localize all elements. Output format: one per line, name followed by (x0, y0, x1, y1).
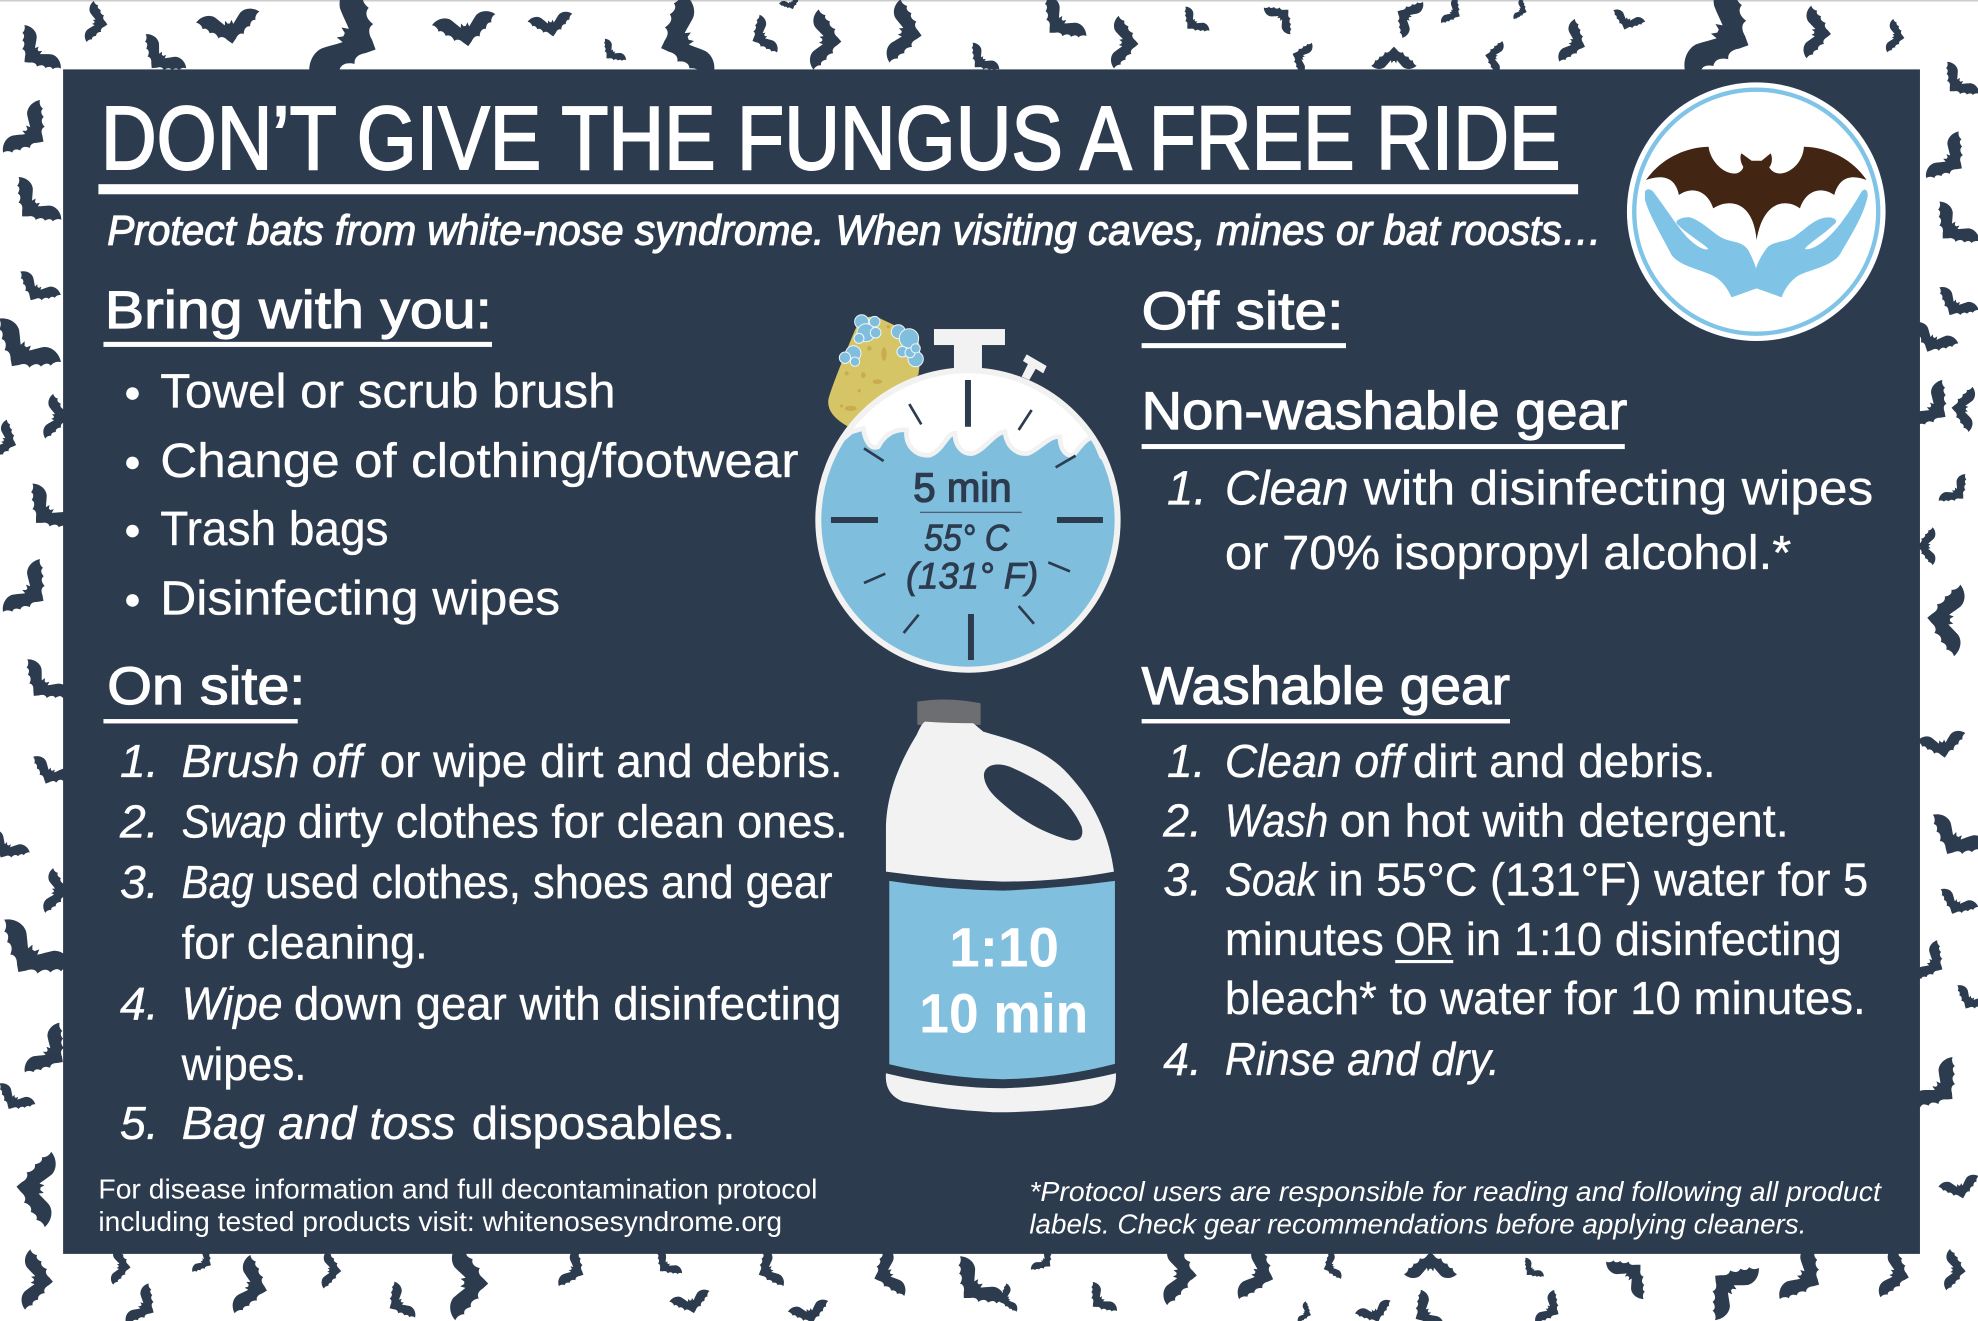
washable gear steps: 4. (1163, 1033, 1202, 1085)
non-washable steps: or 70% isopropyl alcohol.* (1225, 527, 1791, 580)
on site numbered steps: wipes. (181, 1038, 307, 1090)
washable gear steps (1162, 735, 1868, 1085)
icon: sponge with soap bubbles (828, 315, 923, 427)
title: DON’T GIVE THE FUNGUS A FREE RIDE (101, 88, 1560, 188)
on site numbered steps: for cleaning. (182, 917, 428, 969)
on site numbered steps: 1. (120, 735, 159, 787)
icon: stopwatch, 5 min at 55 C (810, 329, 1127, 670)
heading: off site: Off site: (1142, 282, 1343, 341)
on site numbered steps: Brush off (182, 735, 366, 787)
bring with you bullet list (126, 365, 799, 625)
heading: washable gear: Washable gear (1142, 657, 1510, 716)
heading: non-washable gear: Non-washable gear (1142, 382, 1627, 441)
on site numbered steps: 5. (120, 1097, 159, 1149)
icon: bleach bottle, 1:10 for 10 min: 1:10 (949, 916, 1059, 979)
on site numbered steps: used clothes, shoes and gear (265, 856, 833, 908)
washable gear steps: OR (1395, 913, 1453, 965)
footnote: product labels: labels. Check gear recommendations before applying cleaners. (1029, 1209, 1806, 1240)
icon: stopwatch, 5 min at 55 C: 5 min (913, 465, 1012, 511)
on site numbered steps: 3. (120, 856, 159, 908)
washable gear steps: in 1:10 disinfecting (1466, 913, 1842, 965)
washable gear steps: Soak (1225, 854, 1319, 906)
on site numbered steps: dirty clothes for clean ones. (298, 796, 848, 848)
non-washable steps (1167, 463, 1873, 580)
bring with you bullet list: Change of clothing/footwear (160, 435, 799, 488)
footnote: product labels: *Protocol users are responsible for reading and following all product (1029, 1176, 1882, 1207)
on site numbered steps: down gear with disinfecting (294, 977, 841, 1029)
washable gear steps: 3. (1163, 854, 1202, 906)
washable gear steps: minutes (1225, 913, 1384, 965)
washable gear steps: 1. (1167, 735, 1206, 787)
on site numbered steps (119, 735, 848, 1149)
washable gear steps: dirt and debris. (1413, 735, 1716, 787)
subtitle: Protect bats from white-nose syndrome. When visiting caves, mines or bat roosts… (107, 207, 1602, 254)
icon: bleach bottle, 1:10 for 10 min: 10 min (919, 982, 1088, 1045)
washable gear steps: Clean off (1225, 735, 1408, 787)
bring with you bullet list: Towel or scrub brush (160, 365, 616, 418)
heading: on site: On site: (107, 657, 305, 716)
icon: bleach bottle, 1:10 for 10 min (886, 699, 1116, 1112)
washable gear steps: bleach* to water for 10 minutes. (1225, 972, 1866, 1024)
icon: stopwatch, 5 min at 55 C: (131° F) (906, 554, 1038, 596)
washable gear steps: on hot with detergent. (1340, 794, 1789, 846)
on site numbered steps: or wipe dirt and debris. (380, 735, 843, 787)
washable gear steps: Wash (1225, 794, 1328, 846)
bring with you bullet list: Trash bags (160, 503, 389, 556)
on site numbered steps: 4. (120, 977, 159, 1029)
on site numbered steps: Wipe (182, 977, 283, 1029)
heading: bring with you: Bring with you: (105, 281, 492, 340)
washable gear steps: Rinse and dry. (1225, 1033, 1500, 1085)
on site numbered steps: disposables. (472, 1097, 735, 1149)
non-washable steps: 1. (1167, 463, 1207, 516)
on site numbered steps: 2. (119, 796, 159, 848)
on site numbered steps: Bag (182, 856, 254, 908)
icon: bat in hands logo (1627, 82, 1886, 341)
footer: disease information: For disease information and full decontamination protocol (98, 1173, 817, 1204)
non-washable steps: with disinfecting wipes (1363, 463, 1873, 516)
on site numbered steps: Swap (182, 796, 286, 848)
footer: disease information: including tested products visit: whitenosesyndrome.org (98, 1206, 782, 1237)
non-washable steps: Clean (1225, 463, 1349, 516)
on site numbered steps: Bag and toss (182, 1097, 455, 1149)
bring with you bullet list: Disinfecting wipes (160, 572, 560, 625)
footnote: product labels (1029, 1176, 1882, 1240)
washable gear steps: in 55°C (131°F) water for 5 (1328, 854, 1868, 906)
icon: stopwatch, 5 min at 55 C: 55° C (924, 517, 1010, 559)
washable gear steps: 2. (1162, 794, 1202, 846)
footer: disease information (98, 1173, 817, 1237)
